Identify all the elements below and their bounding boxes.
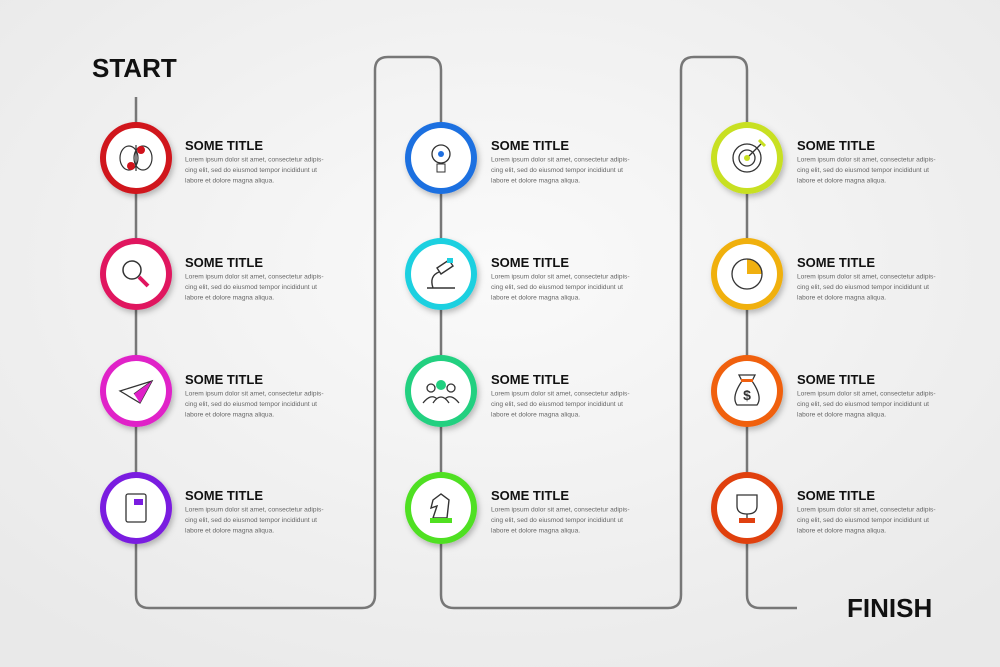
title: START: START	[92, 53, 177, 83]
step 1	[100, 122, 172, 194]
text 9	[797, 138, 936, 184]
icon: microscope	[427, 260, 455, 288]
icon: clock	[747, 259, 762, 274]
step 12	[711, 472, 783, 544]
icon: paper plane	[120, 381, 152, 403]
text 10	[797, 255, 936, 302]
step 11: $	[743, 387, 751, 403]
icon: people	[423, 384, 459, 403]
text 6	[491, 255, 630, 302]
icon: notebook	[126, 494, 146, 522]
text 2	[185, 255, 324, 302]
step 6	[405, 238, 477, 310]
step 10	[711, 238, 783, 310]
step 4	[100, 472, 172, 544]
icon: bulb	[432, 145, 450, 163]
text 3	[185, 372, 324, 418]
title: FINISH: FINISH	[847, 593, 932, 623]
step 5	[405, 122, 477, 194]
text 5	[491, 138, 630, 184]
icon: target	[733, 144, 761, 172]
step 7	[405, 355, 477, 427]
step 11	[711, 355, 783, 427]
text 1	[185, 138, 324, 184]
step 9	[711, 122, 783, 194]
icon: magnifier	[123, 261, 148, 286]
icon: money bag	[735, 375, 759, 405]
icon: brain	[120, 145, 152, 171]
text 11	[797, 372, 936, 418]
text 7	[491, 372, 630, 418]
icon: trophy	[737, 495, 757, 518]
icon: chess knight	[431, 494, 449, 518]
step 2	[100, 238, 172, 310]
text 12	[797, 488, 936, 534]
path line	[136, 57, 797, 608]
text 8	[491, 488, 630, 534]
step 8	[405, 472, 477, 544]
step 3	[100, 355, 172, 427]
text 4	[185, 488, 324, 534]
